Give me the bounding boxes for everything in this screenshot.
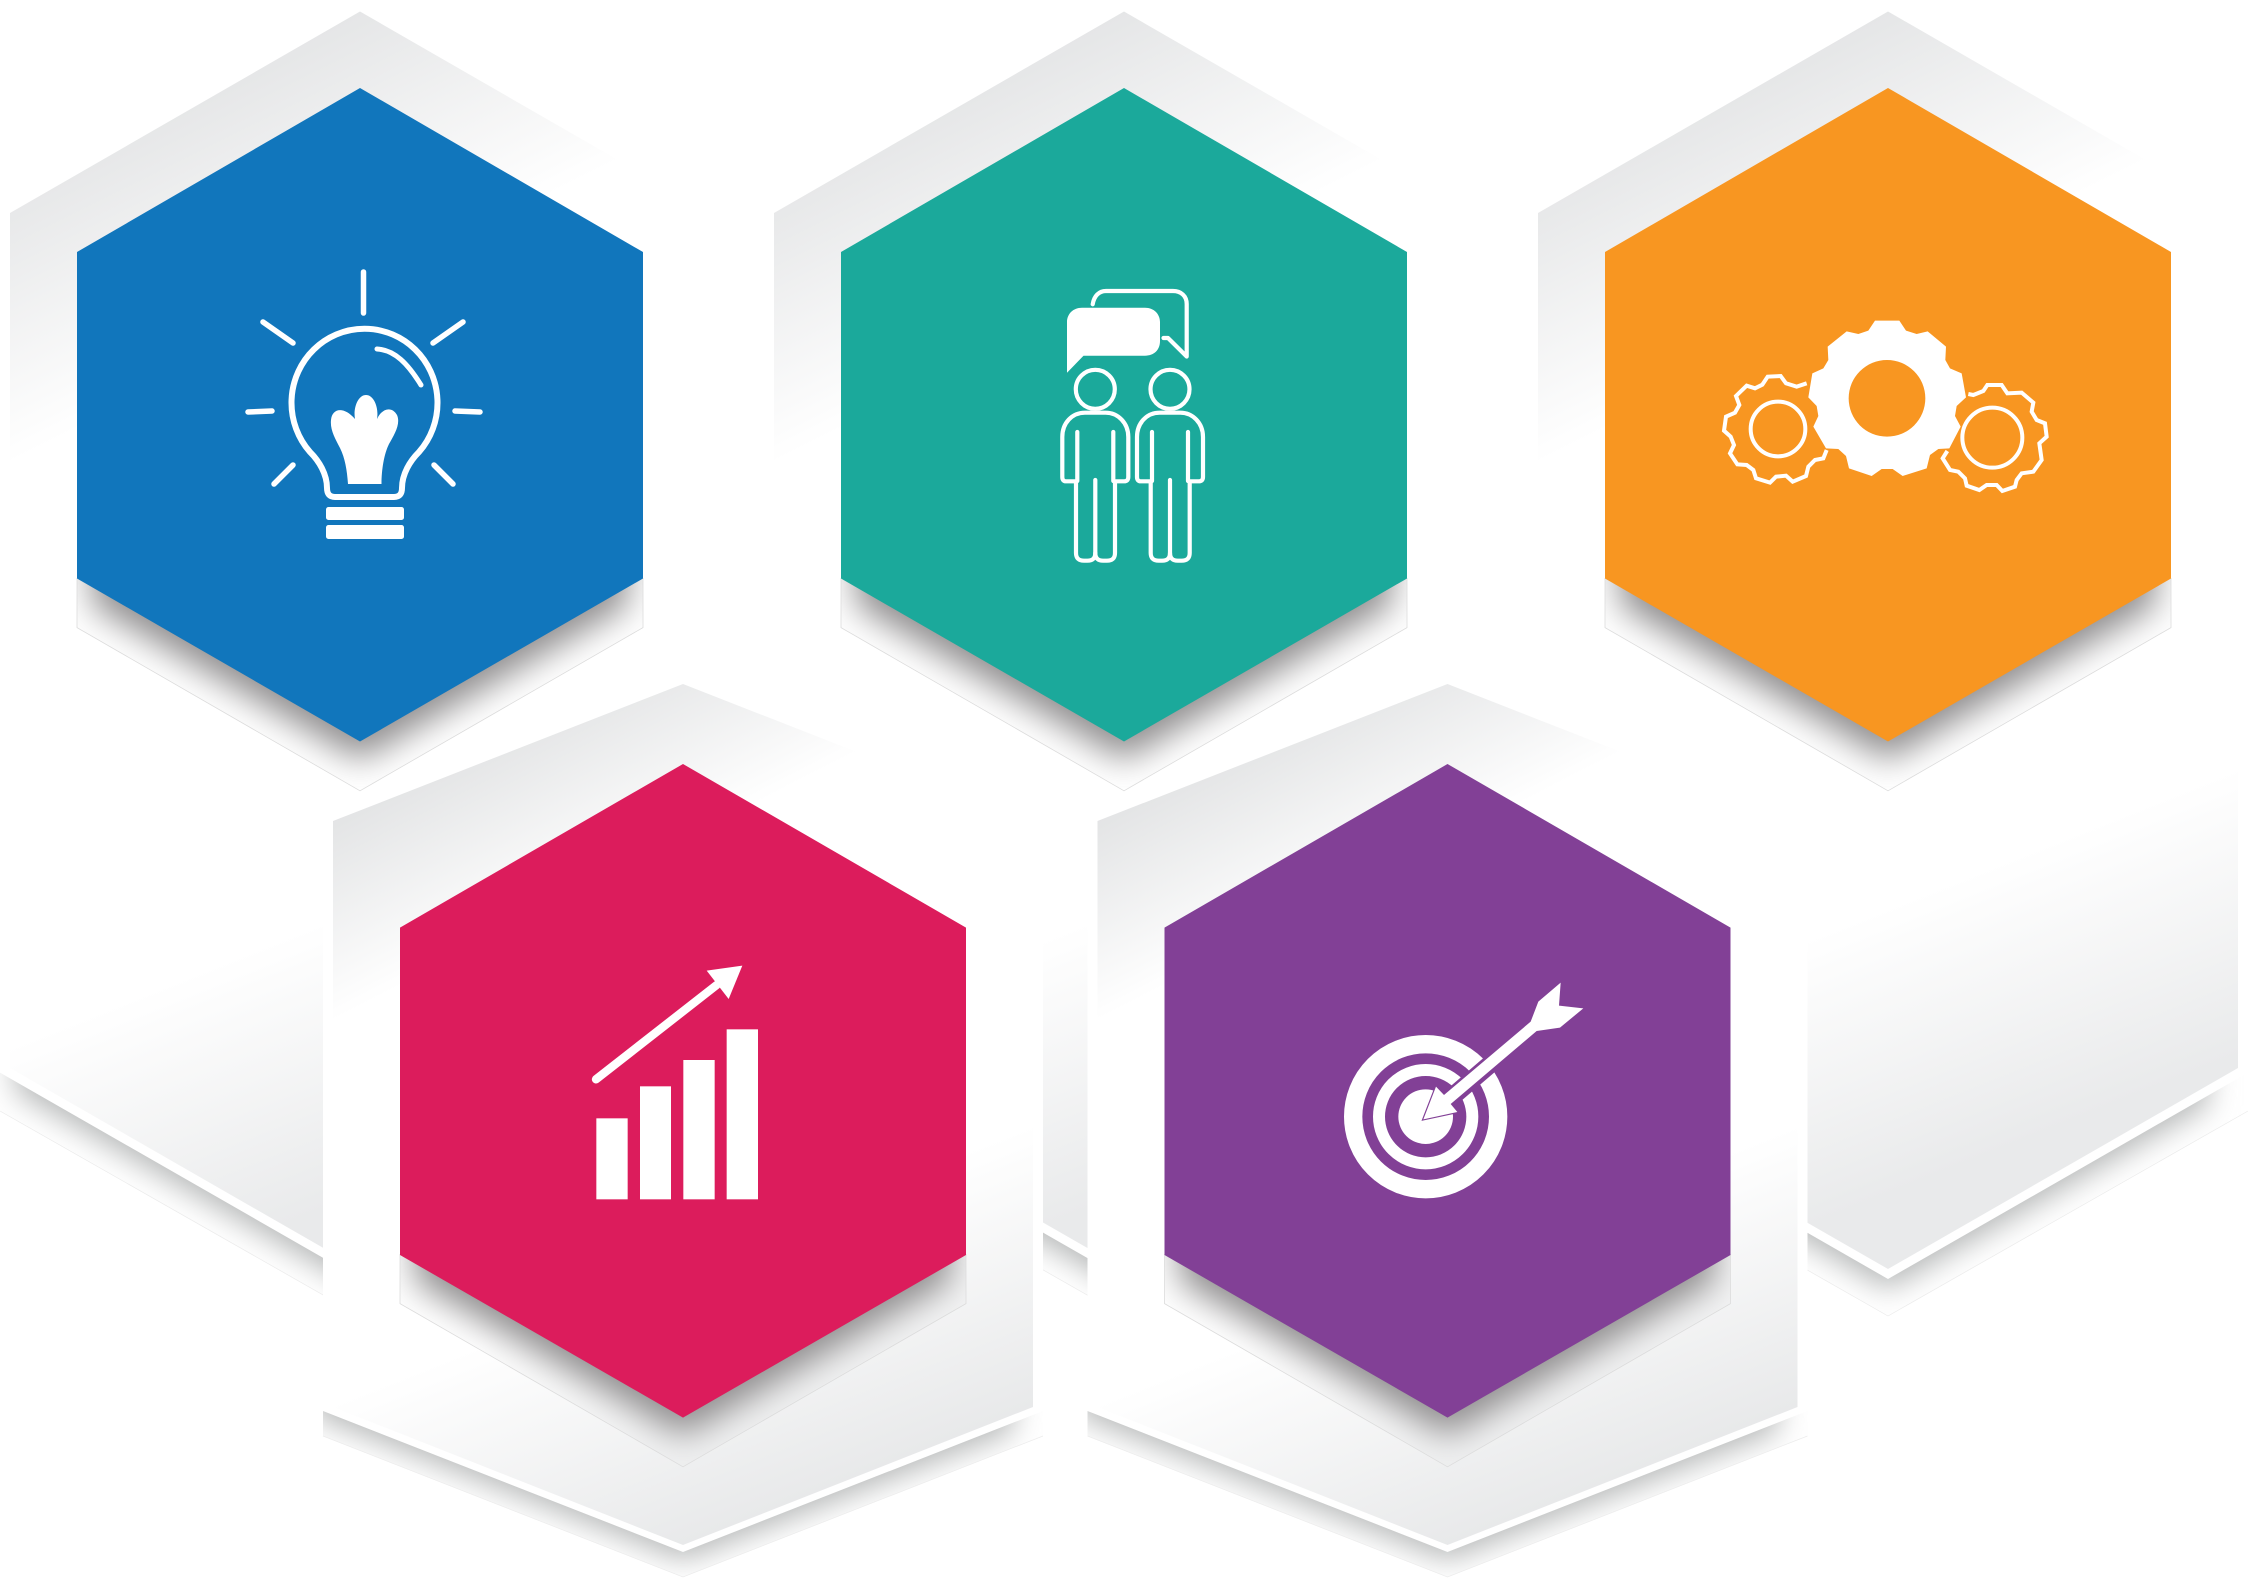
- hexagon shadow: orange: [1604, 578, 2172, 791]
- icon: three gears: [1724, 321, 2047, 491]
- purple hexagon: [1164, 764, 1730, 1418]
- orange hexagon: [1605, 88, 2171, 742]
- pink hexagon: [400, 764, 966, 1418]
- outer grey hexagon: purple: [1078, 684, 1808, 1577]
- arrow: [596, 966, 742, 1079]
- blue hexagon: [77, 88, 643, 742]
- hexagon shadow: teal: [840, 578, 1408, 791]
- icon: lightbulb: [248, 272, 480, 539]
- arrow: [1423, 983, 1583, 1119]
- hexagon shadow: blue: [76, 578, 644, 791]
- bars: [596, 1029, 758, 1199]
- hexagon shadow: pink: [400, 1254, 966, 1467]
- outer grey hexagon: blue: [0, 12, 538, 1295]
- icon: rising bar chart: [596, 966, 758, 1199]
- target rings: [1353, 1044, 1498, 1189]
- icon: two people talking: [1062, 291, 1203, 561]
- outer grey hexagon: teal: [774, 12, 1302, 1296]
- panel: blue lightbulb hexagon: [0, 12, 644, 1295]
- panel: pink growth chart hexagon: [313, 684, 1043, 1577]
- outer grey hexagon: orange: [1528, 12, 2248, 1316]
- outer grey hexagon: pink: [313, 684, 1043, 1577]
- panel: purple target hexagon: [1078, 684, 1808, 1577]
- hexagon shadow: purple: [1164, 1254, 1731, 1467]
- panel: teal people hexagon: [774, 12, 1408, 1296]
- panel: orange gears hexagon: [1528, 12, 2248, 1316]
- teal hexagon: [841, 88, 1407, 742]
- icon: target with arrow: [1353, 983, 1583, 1189]
